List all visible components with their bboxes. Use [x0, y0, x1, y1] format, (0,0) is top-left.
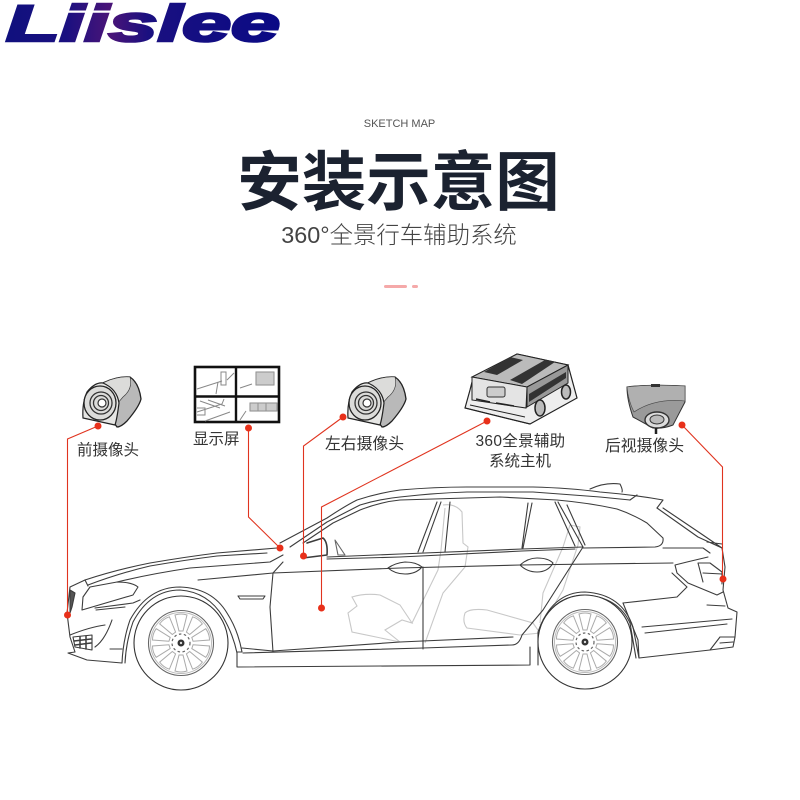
wheel: front — [134, 596, 228, 690]
leader: rear camera — [682, 425, 722, 578]
title: 安装示意图 — [237, 147, 560, 219]
label: screen: 显示屏 — [193, 431, 240, 448]
pillars and beltline — [418, 502, 532, 552]
door handles — [520, 558, 553, 572]
label: host unit: 360全景辅助 — [476, 432, 565, 450]
seats ghost lines — [348, 505, 580, 643]
label: host unit — [476, 432, 565, 470]
icon: front camera — [83, 377, 141, 427]
icon: display screen — [194, 367, 280, 423]
leader: side camera — [304, 417, 343, 556]
subtitle: 360°全景行车辅助系统 — [281, 222, 517, 248]
grille — [70, 590, 75, 613]
waist crease — [198, 563, 673, 580]
label: rear camera: 后视摄像头 — [605, 437, 684, 455]
wheel arches — [122, 587, 242, 663]
spoiler and tailgate — [590, 484, 637, 500]
tail light — [675, 557, 723, 595]
front side marker — [238, 596, 265, 599]
red anchor dots — [64, 414, 726, 618]
icon: system host unit — [465, 354, 577, 424]
label: host unit: 系统主机 — [489, 452, 551, 470]
leader: host unit — [322, 421, 487, 608]
car line drawing — [67, 484, 737, 667]
icon: side camera — [348, 377, 406, 427]
leader: screen — [248, 428, 280, 548]
labels — [77, 431, 684, 470]
label: side camera: 左右摄像头 — [325, 435, 404, 453]
leader: front camera — [68, 426, 98, 615]
small heading: SKETCH MAP — [364, 118, 435, 130]
accent dash — [384, 285, 418, 288]
windshield pillar and roof — [280, 487, 663, 543]
car nose and hood — [67, 580, 122, 663]
headlight — [82, 582, 138, 610]
red leader lines — [68, 417, 722, 615]
door seams and sills — [270, 562, 283, 652]
rear outline — [623, 548, 737, 658]
icon: rear camera — [627, 384, 685, 434]
mirror — [303, 538, 327, 558]
wheel: rear — [538, 595, 632, 689]
label: front camera: 前摄像头 — [77, 441, 139, 459]
